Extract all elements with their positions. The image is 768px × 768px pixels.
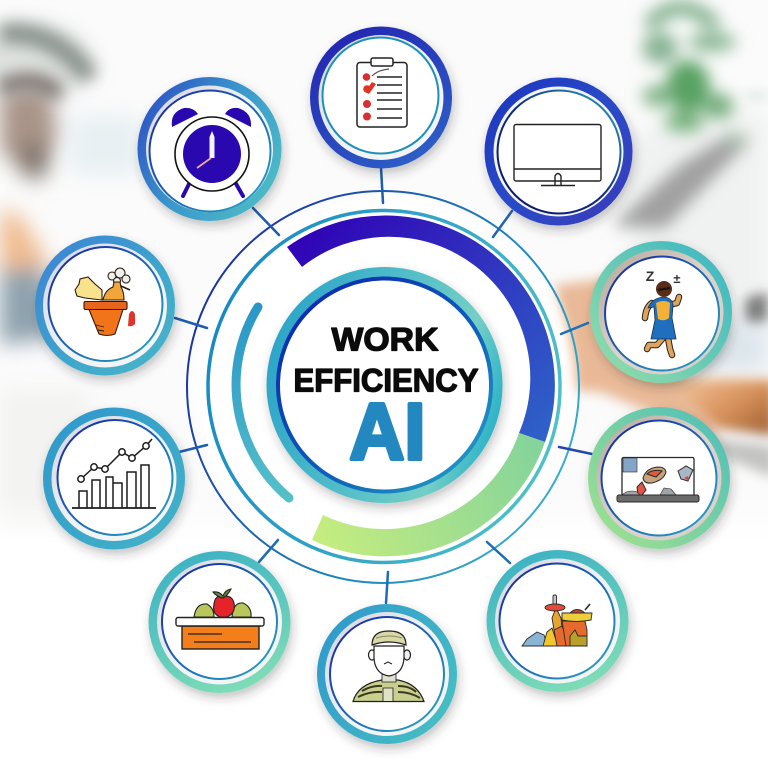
badge: walking person bbox=[590, 241, 732, 383]
icon: chart bbox=[72, 439, 156, 508]
middle ring bbox=[208, 210, 560, 562]
title: WORK EFFICIENCY AI: WORK bbox=[332, 322, 439, 358]
badge: checklist clipboard bbox=[310, 26, 452, 168]
icon: fruit tray bbox=[176, 589, 264, 649]
icon: clipboard bbox=[357, 58, 407, 127]
badge: soldier portrait bbox=[317, 604, 457, 744]
title: WORK EFFICIENCY AI bbox=[294, 322, 479, 476]
inner teal arc bbox=[236, 307, 289, 498]
badge: cluttered laptop bbox=[588, 407, 730, 549]
badge: desktop monitor bbox=[484, 78, 632, 226]
title: WORK EFFICIENCY AI: AI bbox=[350, 387, 426, 476]
progress arc: purple segment bbox=[287, 216, 555, 442]
icon: soldier bbox=[353, 631, 424, 702]
central hub bbox=[266, 267, 502, 503]
title: WORK EFFICIENCY AI: EFFICIENCY bbox=[294, 362, 479, 398]
progress arc: green segment bbox=[312, 433, 545, 556]
icon: pile of items bbox=[522, 595, 592, 646]
connector lines bbox=[175, 168, 592, 603]
badge: pile of objects bbox=[486, 550, 628, 692]
badge: fruit on desk bbox=[148, 551, 290, 693]
outer thin ring bbox=[187, 191, 579, 583]
icon: laptop bbox=[617, 458, 699, 502]
icon: walking person: Z bbox=[646, 268, 655, 284]
icon: pot with vegetables bbox=[75, 268, 135, 336]
badge: alarm clock bbox=[138, 77, 282, 221]
icon: monitor bbox=[514, 124, 601, 186]
badge: vegetable pot bbox=[35, 236, 175, 376]
icon: alarm clock bbox=[172, 108, 251, 196]
icon: walking person: ± bbox=[673, 271, 681, 286]
icon: walking person bbox=[645, 268, 681, 355]
badge: bar and line chart bbox=[43, 408, 185, 550]
